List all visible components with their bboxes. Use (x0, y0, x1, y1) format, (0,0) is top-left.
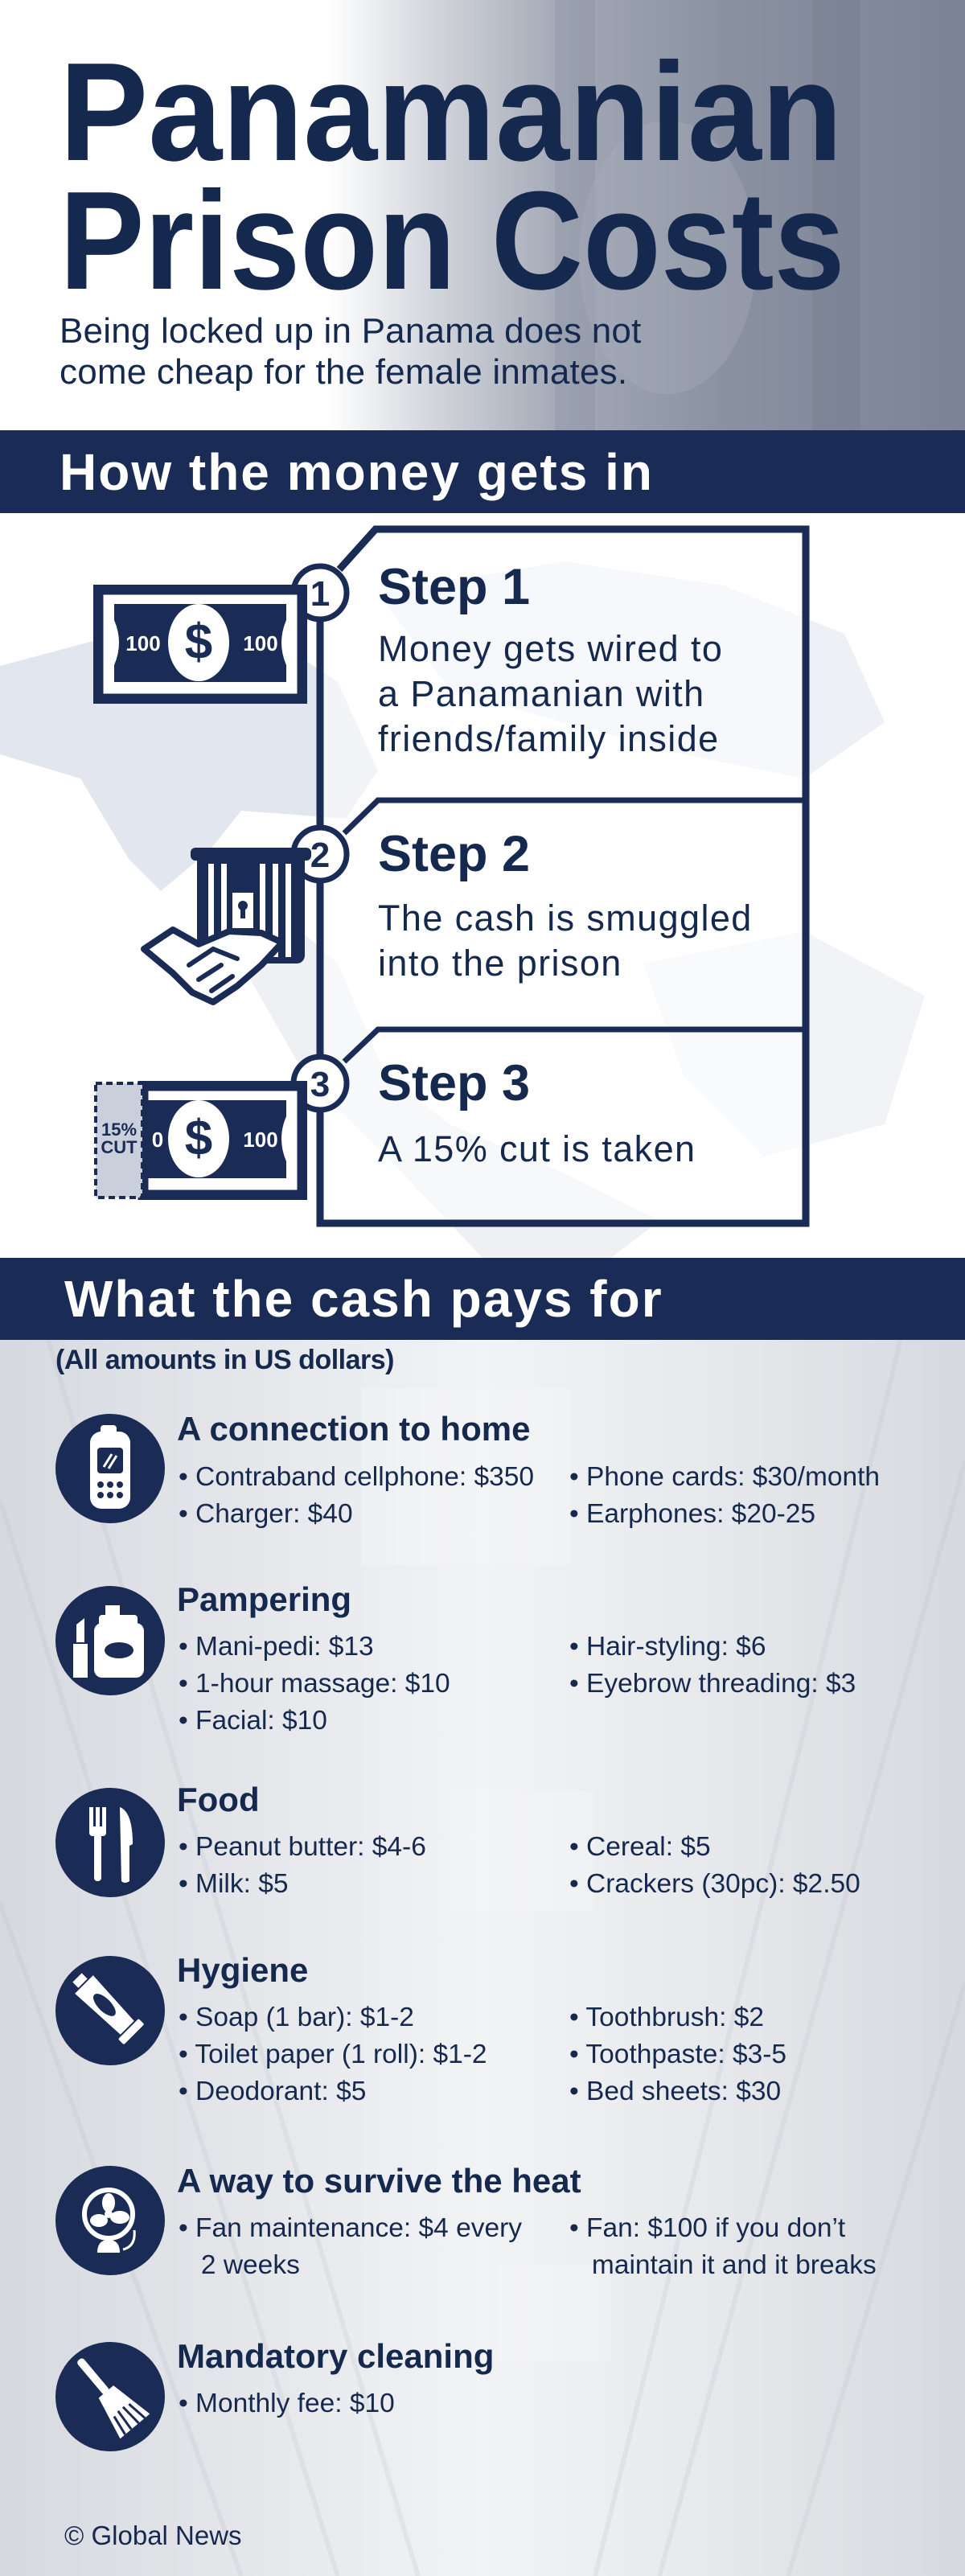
items: • Monthly fee: $10 (179, 2389, 395, 2418)
icon: dollar bill: 100 (243, 631, 278, 655)
category: food (177, 1781, 860, 1899)
category: hygiene (177, 1951, 786, 2106)
step 3 number circle: 3 (310, 1065, 330, 1104)
heading: Food (177, 1781, 260, 1818)
items (179, 2003, 487, 2106)
items: • Soap (1 bar): $1-2 (179, 2003, 414, 2032)
step 2 body: The cash is smuggled (378, 898, 753, 939)
steps frame (317, 526, 809, 1227)
category: food: • Cereal: $5 (569, 1832, 711, 1862)
step 1 heading: Step 1 (378, 559, 530, 615)
note: all amounts in US dollars: (All amounts in US dollars) (55, 1345, 394, 1375)
items (179, 1462, 534, 1529)
step 1 number circle (291, 563, 349, 622)
category: hygiene: • Toothpaste: $3-5 (569, 2040, 786, 2069)
prison photo background (0, 1340, 965, 2576)
step 2 body (378, 898, 753, 984)
step 1 body: friends/family inside (378, 718, 720, 759)
subtitle (60, 311, 642, 392)
step 3 body: A 15% cut is taken (378, 1128, 696, 1169)
step 2 text (378, 826, 753, 984)
icon: dollar bill with cut: CUT (101, 1137, 138, 1157)
band: how the money gets in (0, 430, 965, 513)
step 3 heading: Step 3 (378, 1055, 530, 1111)
step 1 body: a Panamanian with (378, 673, 705, 714)
category: heat: maintain it and it breaks (592, 2250, 877, 2280)
map background (0, 619, 925, 1258)
icon: cage and handshake (141, 848, 311, 1005)
icon: toothpaste (55, 1956, 165, 2065)
category: mandatory cleaning (177, 2337, 494, 2418)
heading: A way to survive the heat (177, 2162, 581, 2200)
category: pampering: • Eyebrow threading: $3 (569, 1669, 856, 1699)
items: • Peanut butter: $4-6 (179, 1832, 426, 1862)
icon: broom (55, 2342, 165, 2451)
category: connection to home (177, 1410, 880, 1529)
items (179, 1832, 426, 1899)
step 1 text (378, 559, 723, 759)
icon: dollar bill with cut (94, 1081, 307, 1200)
category: pampering (177, 1580, 856, 1736)
items: • Toilet paper (1 roll): $1-2 (179, 2040, 487, 2069)
icon: dollar bill (93, 585, 307, 704)
icon: lotion and lipstick (55, 1586, 165, 1695)
band: what the cash pays for (0, 1258, 965, 1340)
icon: fan (55, 2166, 165, 2275)
items (179, 1632, 450, 1736)
items: • Contraband cellphone: $350 (179, 1462, 534, 1492)
band: how the money gets in: How the money gets in (60, 443, 654, 501)
items: • Deodorant: $5 (179, 2077, 366, 2106)
category: connection to home: • Phone cards: $30/month (569, 1462, 880, 1492)
category: hygiene: • Toothbrush: $2 (569, 2003, 764, 2032)
subtitle: come cheap for the female inmates. (60, 352, 627, 392)
heading: Hygiene (177, 1951, 308, 1989)
category: connection to home: • Earphones: $20-25 (569, 1499, 815, 1529)
hero background (0, 0, 965, 430)
category: food: • Crackers (30pc): $2.50 (569, 1869, 860, 1899)
step 2 number circle: 2 (310, 836, 330, 875)
step 3 number circle (291, 1054, 349, 1113)
footer credit: © Global News (64, 2521, 242, 2550)
icon: dollar bill with cut: $ (185, 1111, 212, 1166)
heading: Pampering (177, 1580, 351, 1618)
category: pampering: • Hair-styling: $6 (569, 1632, 766, 1662)
items: • Facial: $10 (179, 1706, 327, 1736)
title: Prison Costs (60, 162, 845, 318)
icon: fork and knife (55, 1788, 165, 1897)
items: • Fan maintenance: $4 every (179, 2213, 522, 2243)
title: Panamanian (60, 33, 843, 190)
step 3 text (378, 1055, 696, 1169)
items (179, 2213, 522, 2280)
icon: dollar bill: $ (185, 614, 212, 670)
category: heat (177, 2162, 877, 2280)
icon: dollar bill with cut: 100 (243, 1128, 278, 1152)
items: 2 weeks (201, 2250, 300, 2280)
items: • Charger: $40 (179, 1499, 353, 1529)
icon: cellphone (55, 1414, 165, 1523)
step 2 body: into the prison (378, 943, 622, 984)
subtitle: Being locked up in Panama does not (60, 311, 642, 351)
icon: dollar bill with cut: 15% (101, 1120, 137, 1140)
items: • Milk: $5 (179, 1869, 288, 1899)
step 1 number circle: 1 (310, 574, 330, 614)
category: heat: • Fan: $100 if you don’t (569, 2213, 845, 2243)
step 2 number circle (291, 825, 349, 883)
band: what the cash pays for: What the cash pays for (64, 1270, 663, 1328)
items: • Mani-pedi: $13 (179, 1632, 374, 1662)
heading: Mandatory cleaning (177, 2337, 494, 2375)
items: • 1-hour massage: $10 (179, 1669, 450, 1699)
heading: A connection to home (177, 1410, 530, 1448)
icon: dollar bill with cut: 0 (152, 1128, 163, 1152)
step 1 body (378, 628, 723, 759)
step 1 body: Money gets wired to (378, 628, 723, 669)
step 2 heading: Step 2 (378, 826, 530, 882)
title (60, 33, 845, 318)
category: hygiene: • Bed sheets: $30 (569, 2077, 781, 2106)
icon: dollar bill: 100 (125, 631, 161, 655)
